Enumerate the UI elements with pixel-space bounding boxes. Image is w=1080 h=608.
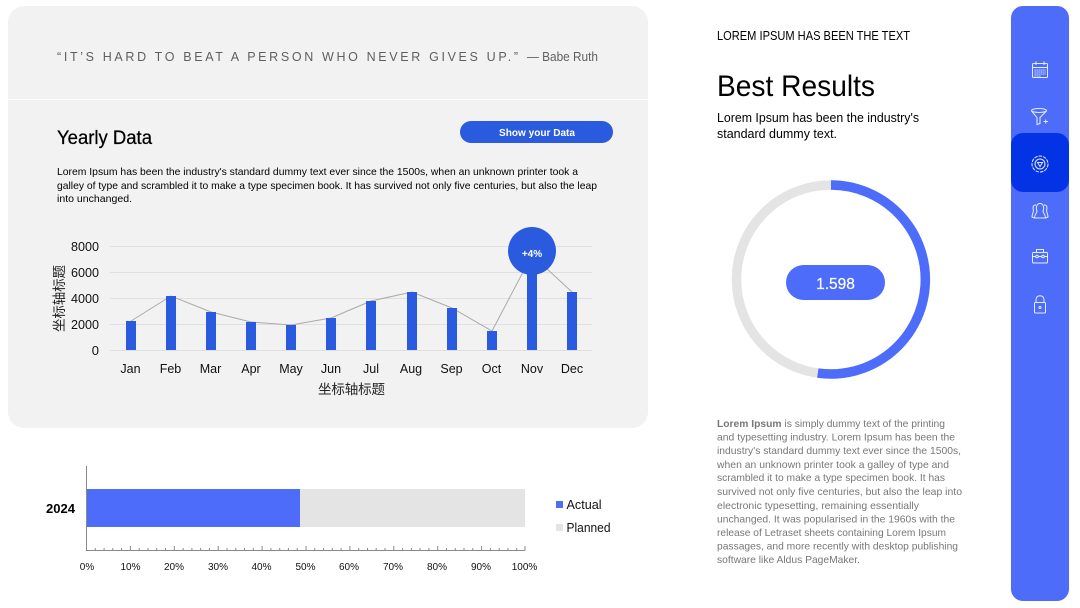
month labels: Jul xyxy=(363,362,379,376)
eyebrow text: LOREM IPSUM HAS BEEN THE TEXT xyxy=(717,29,910,43)
month labels: Dec xyxy=(561,362,583,376)
quote: “IT’S HARD TO BEAT A PERSON WHO NEVER GIVES UP.” xyxy=(57,50,518,64)
panel: sidebar xyxy=(1011,6,1069,601)
axis labels: 0% xyxy=(80,562,94,573)
y axis labels: 2000 xyxy=(71,317,99,332)
value pill: 1.598 xyxy=(816,276,855,293)
text block: lorem ipsum body: when an unknown printer took a galley of type and xyxy=(716,459,949,471)
legend: Planned xyxy=(566,520,610,535)
month labels xyxy=(120,362,583,376)
callout: +4% xyxy=(508,227,556,275)
subheading: Lorem Ipsum has been the industry's xyxy=(717,110,919,125)
subheading: standard dummy text. xyxy=(717,126,837,141)
text block: lorem ipsum body: release of Letraset sheets containing Lorem Ipsum xyxy=(717,527,946,539)
text block: lorem ipsum body xyxy=(716,418,962,566)
text block: lorem ipsum body: survived not only five centuries, but also the leap into xyxy=(717,486,962,498)
quote: — Babe Ruth xyxy=(527,49,598,64)
text block: lorem ipsum body: software like Aldus PageMaker. xyxy=(717,554,860,566)
value pill xyxy=(786,265,885,300)
y axis labels xyxy=(71,239,99,358)
text block: lorem ipsum body: electronic typesetting, remaining essentially xyxy=(717,500,920,512)
month labels: Aug xyxy=(400,362,422,376)
y axis labels: 0 xyxy=(92,343,99,358)
month labels: Jun xyxy=(321,362,341,376)
active tab highlight xyxy=(1011,133,1069,192)
axis labels: 60% xyxy=(339,562,359,573)
icon: lock xyxy=(1034,296,1046,313)
text block: description: into unchanged. xyxy=(57,193,132,205)
month labels: Feb xyxy=(160,362,181,376)
bars xyxy=(126,255,577,350)
axis labels: 80% xyxy=(427,562,447,573)
axis labels: 70% xyxy=(383,562,403,573)
text block: lorem ipsum body: passages, and more recently with desktop publishing xyxy=(717,540,958,552)
icon: people xyxy=(1032,204,1048,218)
icon: calendar xyxy=(1032,62,1048,78)
month labels: Mar xyxy=(200,362,221,376)
text block: description xyxy=(57,166,597,205)
subheading xyxy=(717,110,919,141)
text block: description: galley of type and scrambled it to make a type specimen book. It has survived not only five centuries, but also the leap xyxy=(57,180,597,192)
axis labels: 10% xyxy=(120,562,141,573)
month labels: Sep xyxy=(440,362,463,376)
axis labels: 50% xyxy=(295,562,316,573)
icon: briefcase xyxy=(1032,250,1048,263)
donut chart xyxy=(736,185,926,374)
month labels: Jan xyxy=(120,362,141,376)
icon: gear xyxy=(1032,156,1048,172)
axis labels xyxy=(80,562,537,573)
callout: +4%: +4% xyxy=(522,249,542,260)
month labels: May xyxy=(279,362,304,376)
x axis title: 坐标轴标题 xyxy=(318,382,385,397)
icon: funnel with plus xyxy=(1032,108,1048,124)
text block: lorem ipsum body: Lorem Ipsum is simply dummy text of the printing xyxy=(717,418,945,430)
text block: lorem ipsum body: industry's standard dummy text ever since the 1500s, xyxy=(717,445,961,457)
month labels: Apr xyxy=(241,362,261,376)
y axis labels: 4000 xyxy=(71,291,99,306)
axis labels: 20% xyxy=(164,562,184,573)
month labels: Nov xyxy=(521,362,544,376)
axis labels: 90% xyxy=(471,562,491,573)
axis labels: 100% xyxy=(512,562,537,573)
category label: 2024 xyxy=(46,501,76,516)
y axis title: 坐标轴标题 xyxy=(52,265,67,332)
bullet chart: actual vs planned 2024 xyxy=(46,466,610,573)
heading: best results: Best Results xyxy=(717,70,875,103)
panel: yearly data card xyxy=(8,6,648,428)
heading: yearly data: Yearly Data xyxy=(57,128,152,149)
axis labels: 40% xyxy=(251,562,272,573)
axis labels: 30% xyxy=(208,562,228,573)
y axis labels: 6000 xyxy=(71,265,99,280)
legend: Actual xyxy=(566,497,602,512)
text block: lorem ipsum body: and typesetting industry. Lorem Ipsum has been the xyxy=(717,432,955,444)
text block: description: Lorem Ipsum has been the industry's standard dummy text ever since the 1500s, when an unknown printer took a xyxy=(57,166,578,178)
month labels: Oct xyxy=(482,362,502,376)
text block: lorem ipsum body: unchanged. It was popularised in the 1960s with the xyxy=(717,514,955,526)
bar chart: monthly values xyxy=(52,227,592,397)
text block: lorem ipsum body: scrambled it to make a type specimen book. It has xyxy=(717,472,945,484)
button: show your data xyxy=(460,121,613,143)
legend xyxy=(556,497,610,535)
trend line xyxy=(131,255,572,331)
button: show your data: Show your Data xyxy=(499,127,575,139)
y axis labels: 8000 xyxy=(71,239,99,254)
